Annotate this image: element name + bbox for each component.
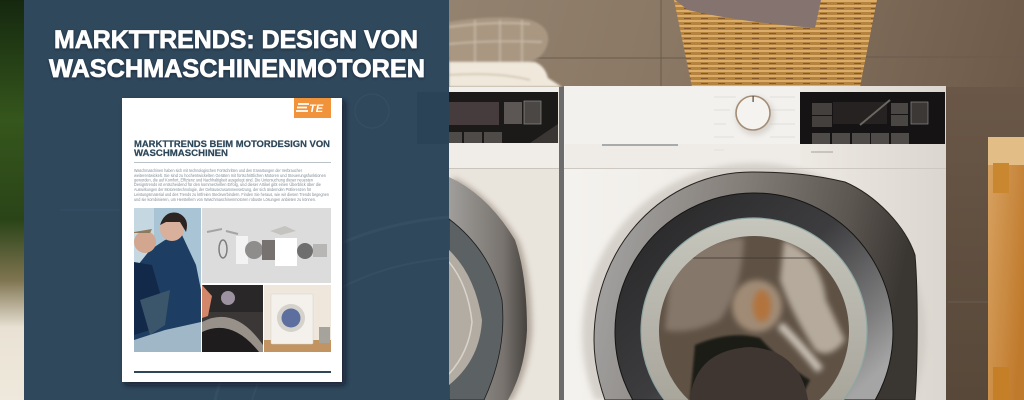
door <box>582 163 926 400</box>
left washing machine <box>449 87 564 400</box>
right washing machine <box>564 86 946 400</box>
document body text: Designtrends ist entscheidend für den kommerziellen Erfolg, und dieser Artikel gibt einen Überblick über die <box>134 182 322 187</box>
door glass <box>641 218 867 400</box>
document heading: MARKTTRENDS BEIM MOTORDESIGN VON <box>134 139 330 150</box>
overlay panel <box>24 0 449 400</box>
document body text: weiterentwickelt. Sie sind zu hochentwickelten Geräten mit fortschrittlichen Motoren und Steuerungsfunktionen <box>134 173 327 178</box>
left machine control panel <box>449 92 558 143</box>
photo: white washer <box>264 285 331 352</box>
document preview <box>122 98 342 382</box>
drum reflections <box>655 232 853 400</box>
program dial <box>736 96 774 135</box>
document body text: und sie kombinieren, um Herstellern von Waschmaschinenmotoren robuste Lösungen anbieten zu können. <box>134 197 316 202</box>
document body text: Leistungsmaterial und des Trends zu kItfreien Steckverbindern. Finden Sie heraus, wie wir diesen Trends begegnen <box>134 192 330 197</box>
basket <box>674 0 877 87</box>
document body text <box>134 168 330 202</box>
outer door ring <box>594 172 917 400</box>
right machine control panel <box>800 92 945 144</box>
background wall <box>449 0 1024 400</box>
left machine door <box>449 177 532 400</box>
program labels <box>714 97 795 150</box>
title <box>49 26 425 83</box>
title: WASCHMASCHINENMOTOREN <box>49 55 425 83</box>
door opening indicator <box>811 151 833 153</box>
ghosted machine behind overlay <box>60 92 449 400</box>
white towel <box>449 62 562 87</box>
logo <box>294 98 331 118</box>
photo: engineers <box>134 208 201 352</box>
wooden furniture <box>988 137 1024 400</box>
document body text: Auswirkungen der Motorentechnologie, der Gehäusezusammensetzung, der sich ändernden Präferenzen für <box>134 187 312 192</box>
page <box>122 98 342 382</box>
title: MARKTTRENDS: DESIGN VON <box>54 26 418 54</box>
photo: exploded motor <box>202 208 331 283</box>
document body text: Waschmaschinen haben sich mit technologischen Fortschritten und den Erwartungen der Verbraucher <box>134 168 303 173</box>
document body text: geworden, die auf Komfort, Effizienz und Nachhaltigkeit ausgelegt sind. Die Untersuchung dieser neuesten <box>134 178 314 182</box>
folded beige towel <box>449 17 548 63</box>
towels stack <box>449 17 562 87</box>
grey cloth in basket <box>675 0 821 28</box>
detergent drawer <box>564 87 946 169</box>
left plant strip <box>0 0 24 400</box>
document heading: WASCHMASCHINEN <box>134 148 228 159</box>
inner dark ring <box>615 193 893 400</box>
logo: TE <box>309 103 324 115</box>
photo: dark washer <box>202 285 263 352</box>
document heading <box>134 139 330 159</box>
